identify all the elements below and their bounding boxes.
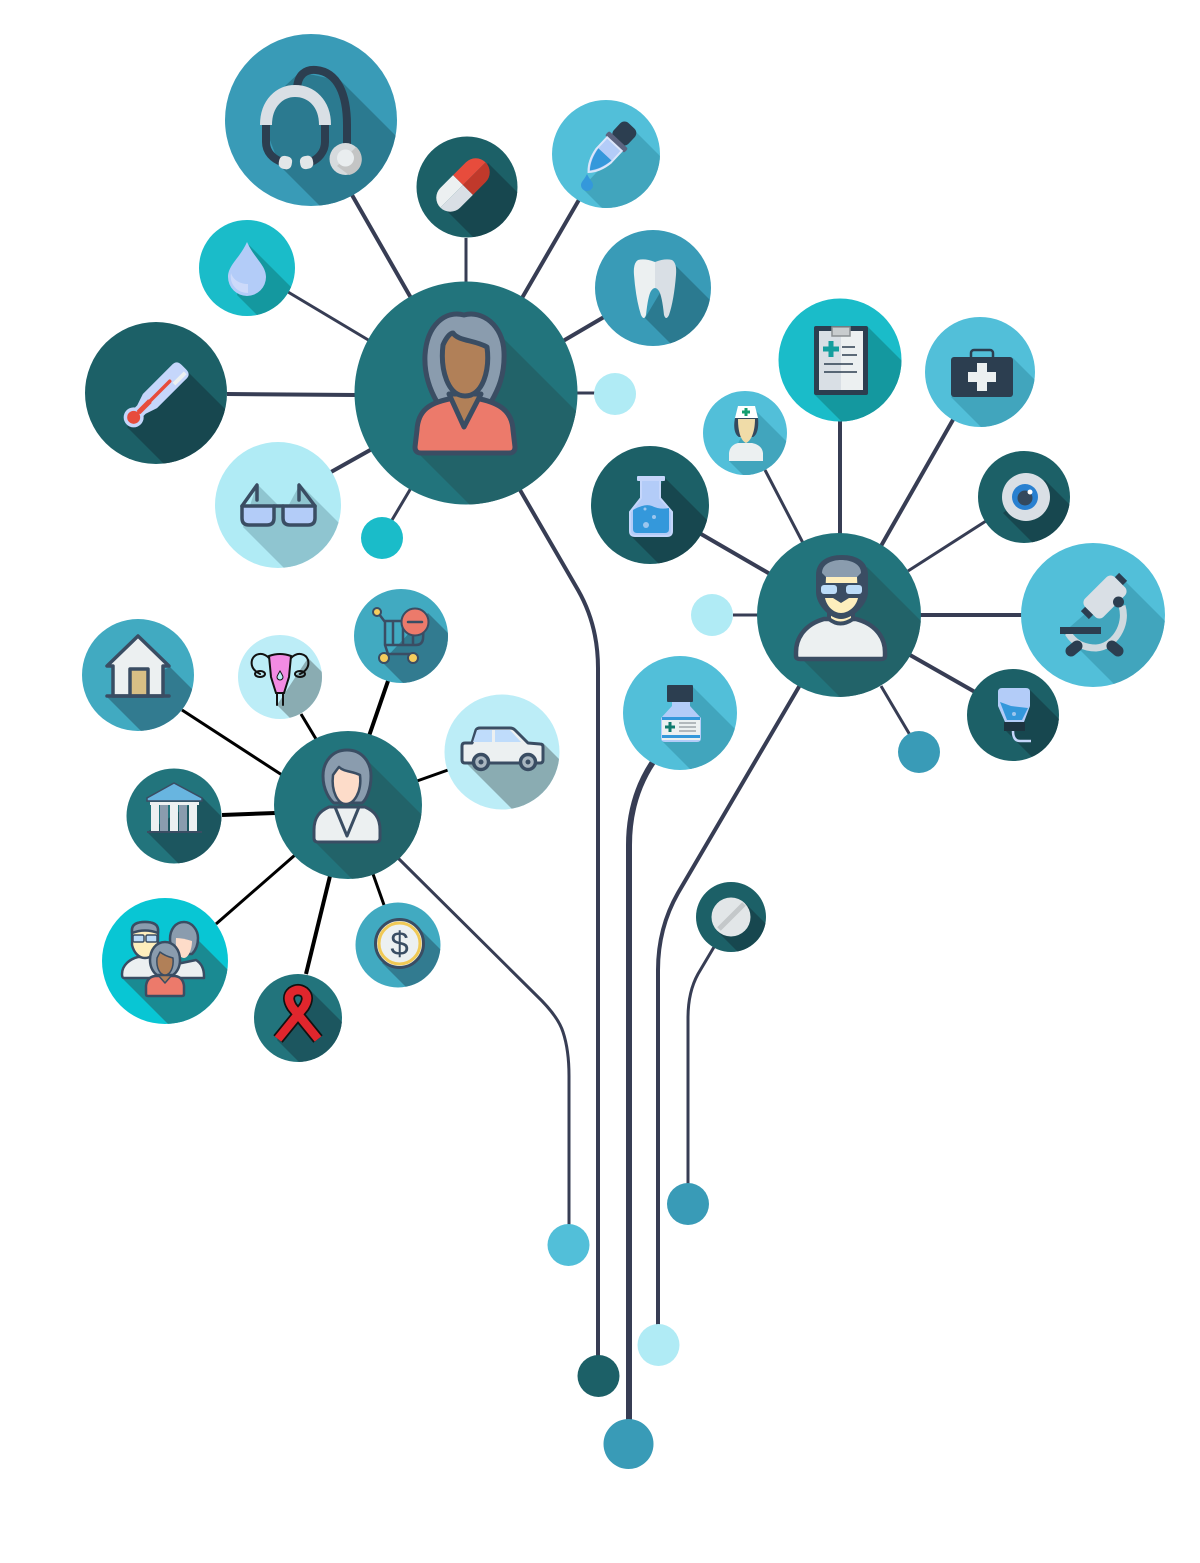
node: car — [444, 694, 560, 810]
icon: car — [462, 728, 543, 770]
connector lines: doctor cluster — [701, 418, 1022, 735]
node: uterus — [238, 635, 322, 719]
node: clipboard — [778, 298, 902, 422]
icon: flask — [630, 476, 672, 536]
node: microscope — [1021, 543, 1165, 687]
icon: dollar coin: $ — [390, 925, 409, 962]
node: woman patient — [354, 282, 578, 504]
icon: group of three people — [122, 922, 204, 996]
icon: doctor avatar — [796, 555, 885, 659]
node: eye — [978, 451, 1070, 543]
icon: uterus — [252, 654, 308, 705]
node: water drop — [199, 220, 295, 316]
icon: shopping cart with minus — [373, 608, 428, 663]
icon: woman avatar light — [314, 750, 380, 842]
icon: eye — [1002, 473, 1050, 521]
node: nurse — [703, 391, 787, 475]
icon: microscope — [1060, 573, 1129, 651]
node: people group — [102, 898, 228, 1024]
icon: dollar coin — [376, 920, 424, 968]
node: government building — [126, 768, 222, 864]
node: dollar coin — [356, 902, 440, 988]
node: thermometer — [85, 322, 227, 464]
icon: bank building — [147, 783, 202, 832]
icon: medicine bottle — [661, 685, 701, 742]
icon: thermometer — [120, 360, 191, 431]
icon: water drop — [228, 242, 266, 296]
icon: IV bag — [998, 688, 1031, 741]
small accent dots — [361, 373, 940, 773]
node: tablet — [696, 882, 766, 952]
node: medical kit — [925, 317, 1035, 427]
node: IV bag — [967, 669, 1059, 761]
node: glasses — [215, 442, 341, 568]
icon: nurse — [729, 406, 763, 461]
connector lines: social factors cluster — [182, 681, 448, 974]
connector lines: woman patient cluster — [227, 195, 604, 520]
node: medicine bottle — [623, 656, 737, 770]
node: house — [82, 619, 194, 731]
icon: capsule — [430, 152, 496, 218]
node: awareness ribbon — [254, 974, 342, 1062]
icon: woman avatar — [415, 314, 515, 453]
icon: tooth — [634, 259, 676, 318]
icon: dropper — [579, 117, 641, 181]
node: dropper — [552, 100, 660, 208]
node: shopping cart — [354, 589, 448, 683]
node: pill — [416, 136, 518, 238]
icon: house — [107, 636, 169, 696]
node: doctor — [757, 533, 921, 697]
icon: stethoscope — [266, 70, 362, 175]
icon: first aid kit — [951, 350, 1013, 397]
icon: glasses — [242, 485, 315, 525]
bottom dots — [548, 1183, 709, 1469]
icon: red ribbon — [278, 990, 318, 1039]
node: tooth — [595, 230, 711, 346]
node: woman professional — [274, 731, 422, 879]
icon: tablet — [712, 898, 750, 936]
node: stethoscope — [225, 34, 397, 206]
node: flask — [591, 446, 709, 564]
trunk lines down to bottom dots — [398, 490, 800, 1430]
icon: clipboard — [814, 326, 868, 395]
